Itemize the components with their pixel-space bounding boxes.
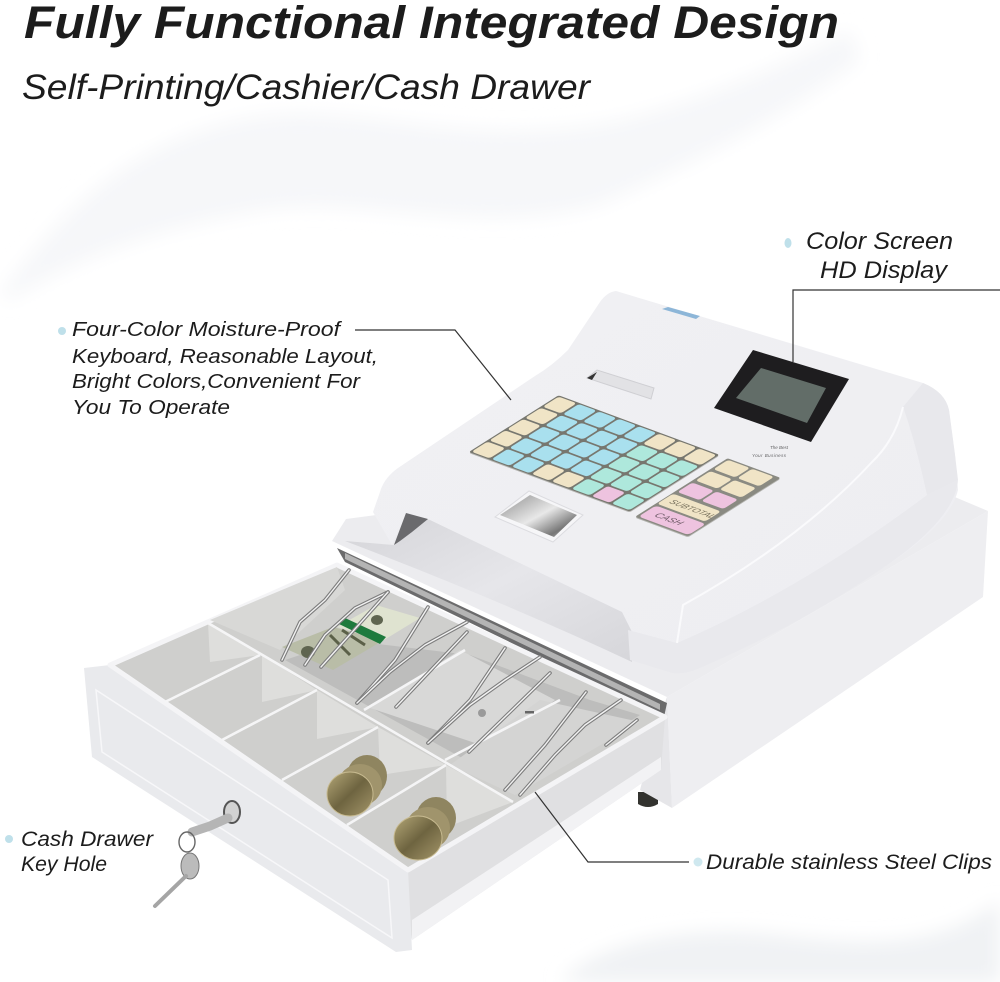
callout: keyboard: Bright Colors,Convenient For <box>72 371 361 393</box>
cash drawer <box>84 565 665 952</box>
blue tab <box>662 307 700 319</box>
banknotes <box>282 605 420 670</box>
callout: keyboard <box>58 319 511 419</box>
small brand text <box>752 445 789 458</box>
small brand text: The Best <box>770 445 789 450</box>
lock and keys <box>155 801 240 906</box>
hood underside <box>345 514 632 662</box>
top unit body <box>345 291 958 673</box>
callout: key hole <box>5 828 154 876</box>
callout: steel clips: Durable stainless Steel Clips <box>706 851 993 874</box>
cash register illustration <box>84 291 988 952</box>
LCD display <box>714 350 849 442</box>
callout: key hole: Key Hole <box>21 853 107 876</box>
bill bays <box>285 640 640 790</box>
hood opening edge <box>394 513 428 545</box>
callout: keyboard: Keyboard, Reasonable Layout, <box>72 346 378 368</box>
compartment walls <box>208 623 260 662</box>
coins <box>327 755 456 860</box>
small brand text: Your Business <box>752 453 787 458</box>
front skirt <box>628 480 958 673</box>
callout: color screen: Color Screen <box>806 228 953 255</box>
subtitle: Self-Printing/Cashier/Cash Drawer <box>22 68 591 107</box>
drawer side <box>400 717 665 940</box>
drawer front panel <box>84 665 412 952</box>
keyboard: function pad <box>635 458 781 536</box>
compartment dividers <box>165 623 560 825</box>
drawer interior <box>110 565 665 870</box>
callout: keyboard: You To Operate <box>72 397 230 419</box>
receipt window <box>495 491 583 542</box>
callout: color screen: HD Display <box>820 257 949 284</box>
keyboard: main pad <box>469 395 719 511</box>
callout: keyboard: Four-Color Moisture-Proof <box>72 319 343 341</box>
printer slot <box>587 370 654 399</box>
right side panel <box>903 383 958 495</box>
callout: key hole: Cash Drawer <box>21 828 154 851</box>
cabinet base tray <box>332 480 988 808</box>
steel clips <box>282 570 637 795</box>
callout: steel clips <box>535 792 993 874</box>
callout: color screen <box>784 228 1000 362</box>
